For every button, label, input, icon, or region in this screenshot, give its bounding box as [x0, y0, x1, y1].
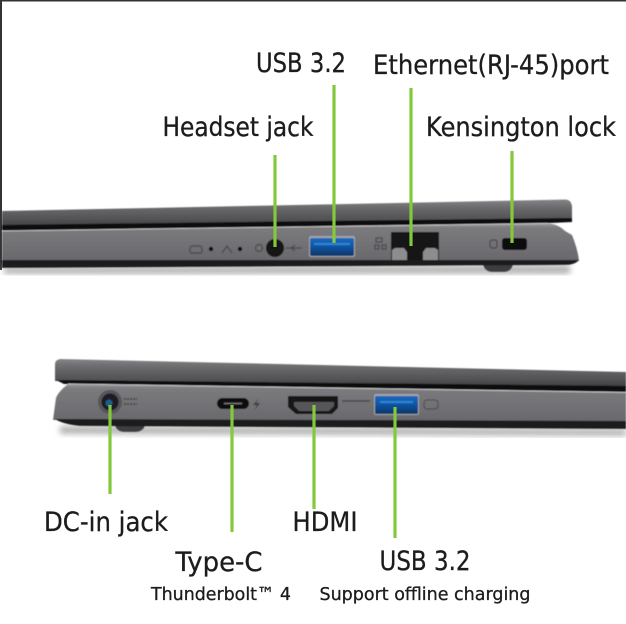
hinge gap [2, 218, 572, 231]
base edge highlight [68, 384, 626, 392]
USB port [309, 236, 355, 257]
hinge gap [56, 380, 626, 392]
thunderbolt icon [253, 398, 260, 411]
base [2, 224, 579, 262]
label: USB 3.2: USB 3.2 [256, 48, 346, 79]
base edge highlight [2, 224, 548, 231]
base [53, 384, 626, 423]
dc symbol [124, 399, 137, 404]
ethernet port [391, 232, 439, 260]
label: Support offline charging: Support offline charging [320, 584, 530, 605]
callout lines [110, 85, 512, 538]
lid [55, 359, 626, 388]
foot [483, 264, 513, 272]
Type-C port [217, 398, 249, 409]
label: Headset jack: Headset jack [162, 112, 314, 143]
headset jack [266, 239, 284, 257]
base underside [2, 260, 579, 268]
label: Type-C: Type-C [175, 547, 262, 578]
DC-in jack [98, 390, 122, 414]
shadow [4, 265, 570, 274]
status dots [209, 247, 213, 251]
kensington lock [502, 238, 527, 250]
label: Thunderbolt 4: Thunderbolt™ 4 [150, 584, 291, 605]
laptop: left side view [53, 359, 626, 436]
label: DC-in jack: DC-in jack [44, 507, 168, 538]
HDMI port [288, 396, 338, 414]
label: USB 3.2: USB 3.2 [380, 546, 470, 577]
lid [2, 200, 572, 228]
charging label [424, 400, 438, 409]
USB port [374, 394, 419, 415]
label: HDMI: HDMI [292, 507, 358, 538]
port labels [190, 238, 497, 253]
HDMI label [342, 400, 370, 402]
frame edge [0, 0, 626, 270]
foot [115, 425, 145, 432]
laptop: right side view [2, 200, 579, 274]
shadow [60, 426, 626, 436]
base underside [55, 419, 626, 429]
